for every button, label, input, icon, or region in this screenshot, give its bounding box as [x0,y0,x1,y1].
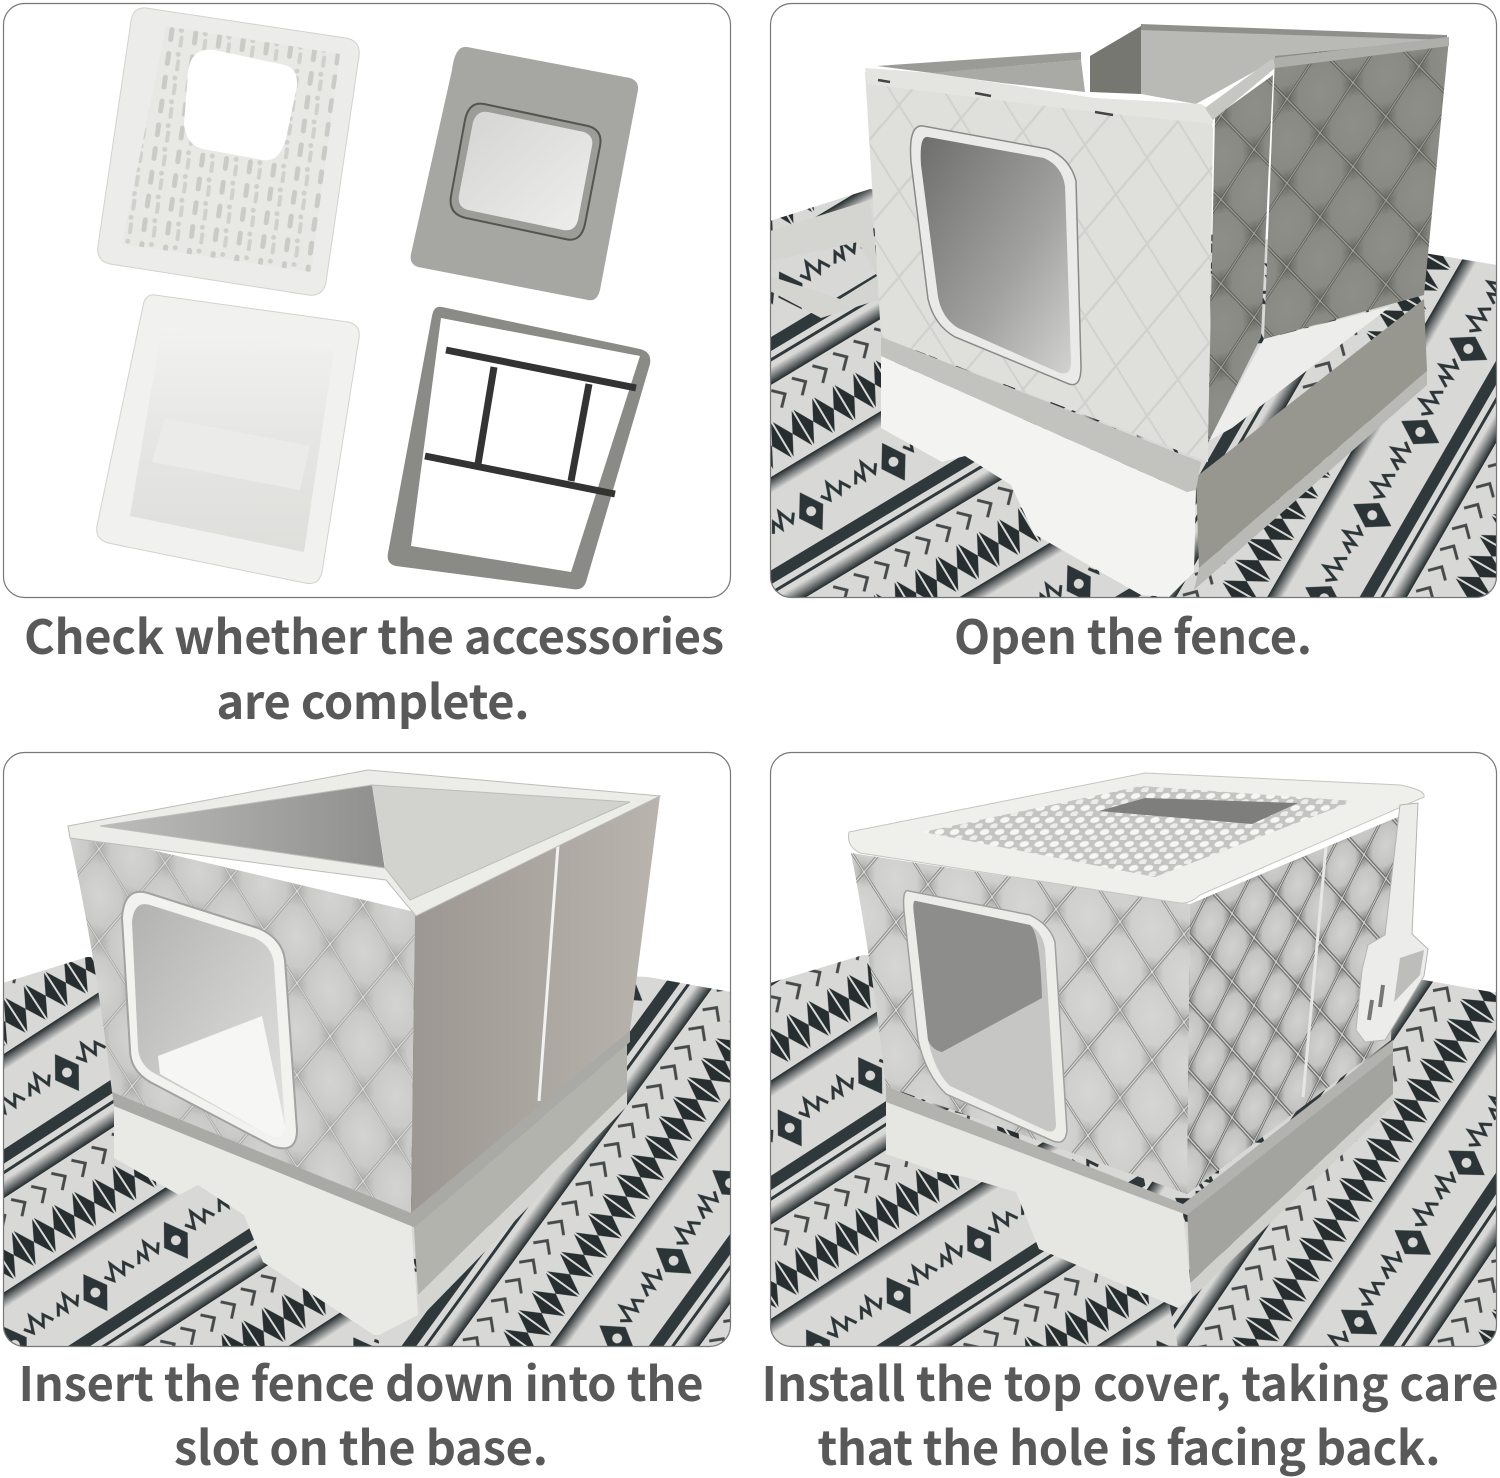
caption: step 4: Install the top cover, taking care [762,1346,1498,1415]
rug left part [3,957,380,1347]
folded cover on rug [770,200,881,318]
opened side fence panels [1205,37,1449,443]
white front fence panel [865,68,1213,462]
transparent door [904,891,1067,1142]
panel: open the fence [770,3,1497,598]
panel 2 border [770,4,1496,598]
base tray [112,1030,630,1335]
litter scoop [1356,803,1428,1042]
caption: step 4 second line: that the hole is facing back. [818,1410,1440,1478]
rug right part [1144,966,1496,1347]
caption: step 3 second line: slot on the base. [174,1410,548,1478]
caption: step 1: Check whether the accessories [24,599,724,668]
rug left part [770,955,1178,1347]
rug right part [378,966,730,1347]
right quilted panel [411,796,660,1213]
base frame with bars [388,307,650,589]
inner back walls [877,24,1447,104]
floor visible through the open side [1208,306,1391,441]
panel: insert the fence [3,752,731,1347]
rug right part [1136,234,1496,598]
caption: step 2: Open the fence. [954,599,1312,668]
panel: install the top cover [770,752,1497,1347]
top cover with hole [98,8,359,295]
box interior right wall [372,785,630,900]
panel: accessories check [4,4,730,598]
top rim [68,770,660,916]
litter tray [97,295,359,584]
front quilted panel [68,830,415,1213]
caption: step 1 second line: are complete. [216,664,530,733]
top cover [848,773,1424,903]
rug left part [770,189,1165,598]
box interior left wall [100,785,385,870]
panel 3 border [4,752,730,1346]
transparent door [910,126,1081,385]
right quilted panel [1187,817,1398,1194]
base tray [881,299,1427,597]
base tray [886,1040,1393,1308]
panel 4 border [770,752,1496,1346]
folded fence with window [411,47,638,300]
caption: step 3: Insert the fence down into the [18,1346,704,1415]
transparent door [122,892,297,1148]
front quilted panel [851,853,1190,1194]
